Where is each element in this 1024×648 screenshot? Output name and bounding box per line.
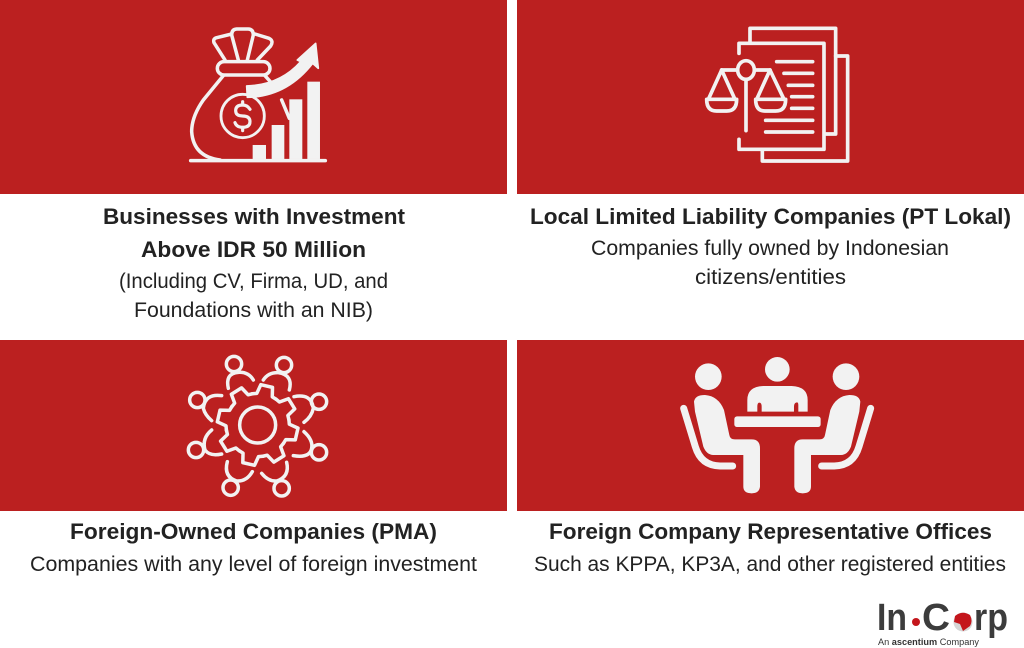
text: including CV, Firma, UD, foundations <box>119 270 388 322</box>
text: KPPA, KP3A and other entities: Such as KPPA, KP3A, and other registered entities <box>534 553 1006 576</box>
heading: foreign company representative offices: Foreign Company Representative Offices <box>549 519 992 544</box>
logo: InCorp: An ascentium Company <box>878 637 979 647</box>
logo: InCorp: rp <box>974 597 1008 639</box>
panel: local limited liability companies <box>517 0 1024 194</box>
heading: businesses with investment: Above IDR 50 Million <box>141 237 366 262</box>
icon: people around a gear <box>188 356 327 496</box>
text: companies fully owned by Indonesians: citizens/entities <box>695 266 846 289</box>
text: including CV, Firma, UD, foundations: Foundations with an NIB) <box>134 299 373 322</box>
text: companies fully owned by Indonesians <box>591 237 949 289</box>
icon: legal documents with scales <box>707 28 848 161</box>
heading: businesses with investment <box>103 204 406 262</box>
logo: InCorp: In <box>877 597 907 639</box>
icon: money bag with rising bars <box>191 29 325 161</box>
panel: foreign-owned companies <box>0 340 507 511</box>
text: any level of foreign investment: Companies with any level of foreign investment <box>30 553 477 576</box>
logo: InCorp: C <box>922 597 950 639</box>
heading: local limited liability companies: Local Limited Liability Companies (PT Lokal) <box>530 204 1011 229</box>
text: companies fully owned by Indonesians: Companies fully owned by Indonesian <box>591 237 949 260</box>
heading: businesses with investment: Businesses with Investment <box>103 204 406 229</box>
panel: businesses above IDR 50 million <box>0 0 507 194</box>
heading: foreign-owned companies: Foreign-Owned Companies (PMA) <box>70 519 437 544</box>
logo: InCorp <box>877 597 1008 647</box>
text: including CV, Firma, UD, foundations: (Including CV, Firma, UD, and <box>119 270 388 293</box>
panel: representative offices <box>517 340 1024 511</box>
icon: three people at a table <box>684 357 871 493</box>
